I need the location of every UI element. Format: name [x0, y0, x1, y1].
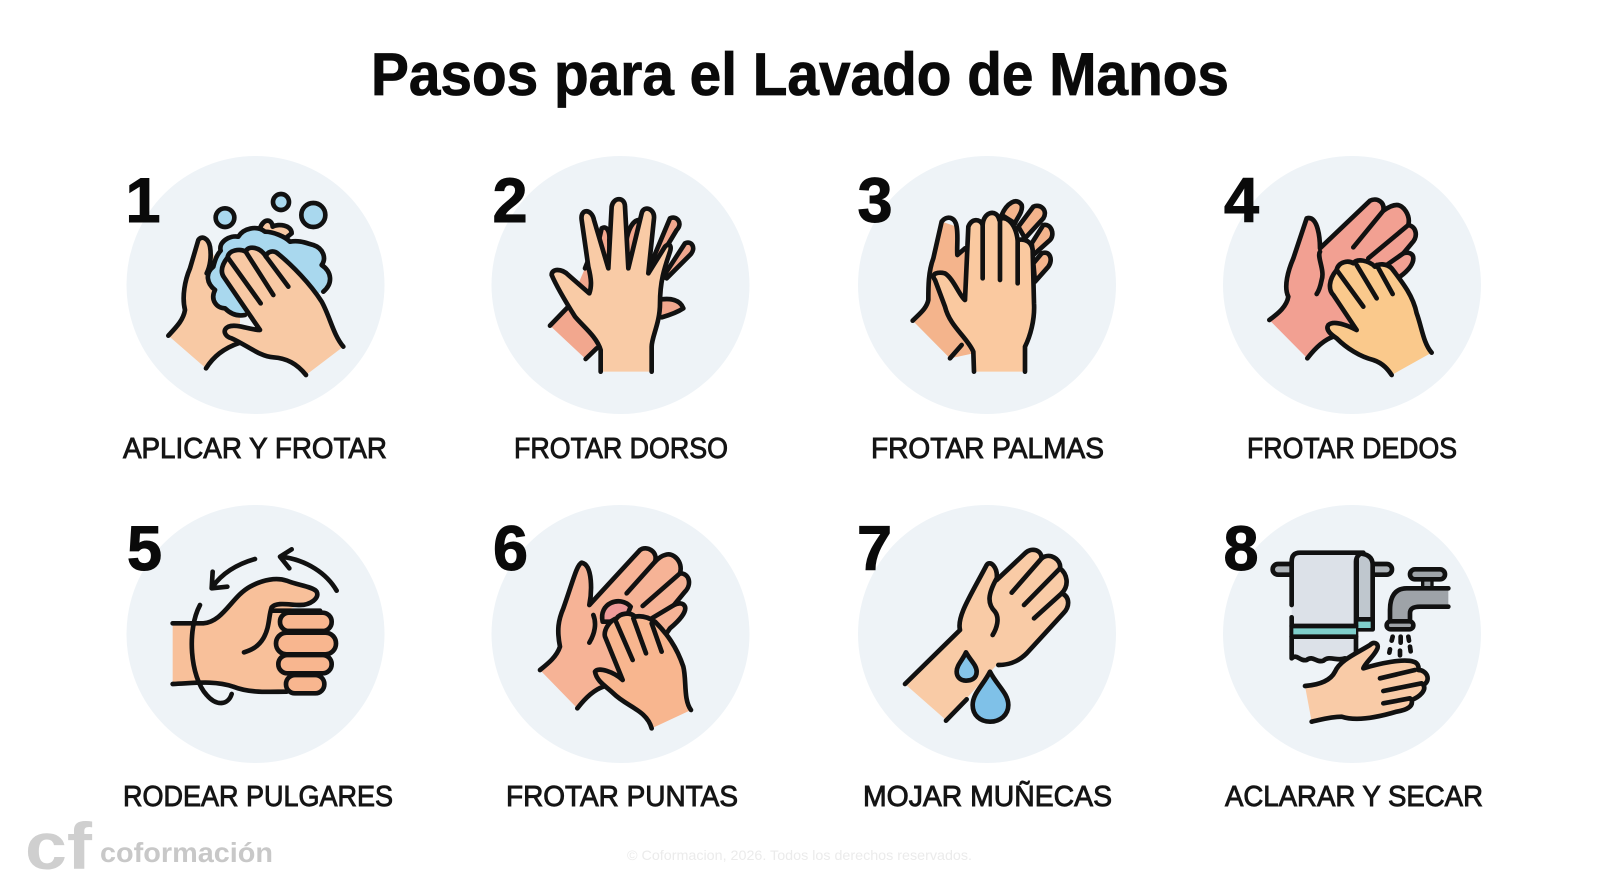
label: FROTAR DEDOS — [1247, 433, 1457, 465]
number 8: 8 — [1223, 514, 1259, 584]
step 5: rodear pulgares — [123, 505, 393, 813]
number 3: 3 — [857, 166, 893, 236]
step 1: aplicar y frotar — [123, 156, 387, 465]
circle background — [126, 156, 384, 414]
icon: hand over back of hand — [550, 199, 693, 372]
circle background — [858, 505, 1116, 763]
icon: palms together — [913, 201, 1052, 372]
label: FROTAR PUNTAS — [506, 781, 738, 813]
circle background — [492, 156, 750, 414]
step 4: frotar dedos — [1223, 156, 1481, 465]
step 6: frotar puntas — [492, 505, 750, 813]
icon: fingertips rubbing palm — [540, 548, 691, 728]
water droplets — [1389, 637, 1411, 655]
title: Pasos para el Lavado de Manos — [371, 41, 1229, 108]
footer logo — [25, 809, 273, 880]
icon: towel, faucet and hand — [1273, 553, 1448, 722]
label: ACLARAR Y SECAR — [1225, 781, 1483, 813]
number 6: 6 — [493, 514, 528, 584]
towel — [1292, 553, 1363, 661]
number 7: 7 — [857, 514, 892, 584]
logo wordmark: coformación — [100, 837, 273, 868]
arrow: left — [212, 559, 255, 588]
pink rub mark — [602, 601, 631, 622]
circle background — [858, 156, 1116, 414]
circle background — [126, 505, 384, 763]
label: FROTAR DORSO — [514, 433, 728, 465]
label: APLICAR Y FROTAR — [123, 433, 387, 465]
circle background — [492, 505, 750, 763]
icon: soapy hands — [168, 194, 343, 375]
arrow: right — [280, 549, 337, 591]
faucet — [1423, 577, 1432, 589]
number 2: 2 — [492, 166, 528, 236]
label: FROTAR PALMAS — [871, 433, 1104, 465]
step 7: mojar munecas — [857, 505, 1116, 813]
icon: fist with rotation arrows — [173, 549, 337, 703]
step 8: aclarar y secar — [1223, 505, 1483, 813]
circle background — [1223, 156, 1481, 414]
number 4: 4 — [1224, 166, 1259, 236]
icon: wrist with water drops — [905, 550, 1068, 722]
step 2: frotar dorso — [492, 156, 750, 465]
label: MOJAR MUÑECAS — [863, 779, 1112, 813]
towel bar — [1273, 564, 1392, 575]
copyright: © Coformacion, 2026. Todos los derechos reservados. — [627, 847, 972, 863]
circle background — [1223, 505, 1481, 763]
label: RODEAR PULGARES — [123, 781, 393, 813]
hand — [1305, 643, 1428, 722]
large drop — [973, 672, 1008, 722]
small drop — [957, 652, 977, 681]
number 5: 5 — [127, 514, 162, 584]
number 1: 1 — [125, 166, 161, 236]
icon: fingers rubbing palm — [1269, 200, 1432, 375]
step 3: frotar palmas — [857, 156, 1116, 465]
